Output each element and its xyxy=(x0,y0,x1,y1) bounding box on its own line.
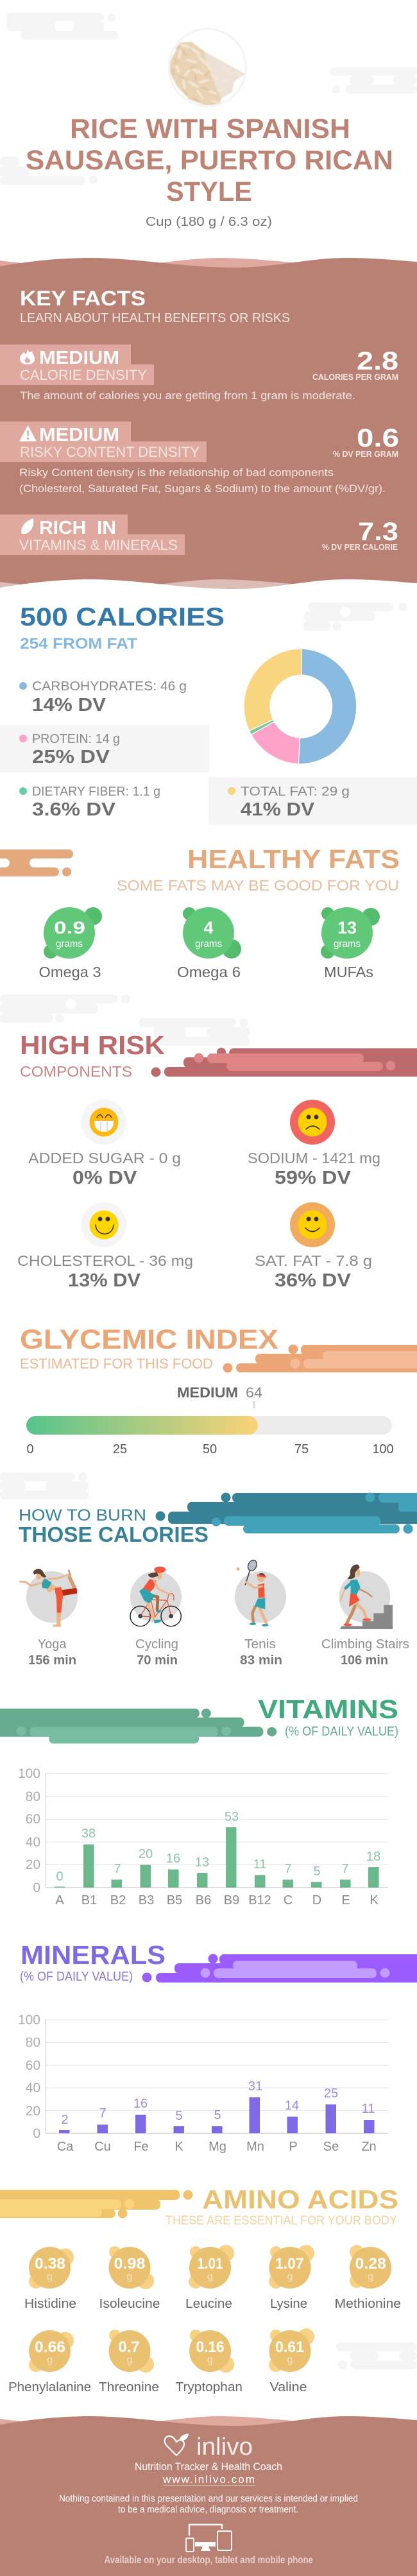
rating: RICH IN xyxy=(39,518,116,538)
value labels: 31 xyxy=(248,2079,262,2094)
gauge scale: 100 xyxy=(372,1442,394,1456)
x axis: B6 xyxy=(196,1893,211,1907)
gauge bar xyxy=(26,1416,392,1435)
value labels: 38 xyxy=(81,1827,96,1841)
risk item: sodium: SODIUM - 1421 mg xyxy=(248,1150,380,1166)
legend: total fat: TOTAL FAT: 29 g xyxy=(241,785,350,799)
label: Yoga xyxy=(38,1637,67,1651)
value labels xyxy=(61,2079,375,2127)
heading band xyxy=(0,849,74,876)
unit: % DV PER GRAM xyxy=(333,449,398,459)
website link: www.inlivo.com xyxy=(162,2473,255,2486)
legend: protein: PROTEIN: 14 g xyxy=(32,732,120,746)
y axis: 100 xyxy=(18,2013,40,2027)
heading band xyxy=(223,1345,417,1373)
legend: carbohydrates xyxy=(19,679,187,715)
amino badge: phenylalanine: 0.66 xyxy=(35,2339,65,2356)
subheading: THESE ARE ESSENTIAL FOR YOUR BODY xyxy=(166,2214,397,2228)
panel: healthy fats xyxy=(0,844,400,980)
x axis: B3 xyxy=(139,1893,154,1907)
legend: carbohydrates: CARBOHYDRATES: 46 g xyxy=(32,679,187,694)
duration: 106 min xyxy=(341,1653,388,1668)
bar chart: minerals xyxy=(18,2013,388,2154)
subheading: LEARN ABOUT HEALTH BENEFITS OR RISKS xyxy=(20,311,290,325)
heading band xyxy=(142,1954,417,1983)
value labels: 25 xyxy=(324,2086,338,2101)
x axis xyxy=(55,1893,379,1907)
availability note: Available on your desktop, tablet and mobile phone xyxy=(104,2555,313,2566)
risk item: saturated fat: SAT. FAT - 7.8 g xyxy=(255,1252,372,1269)
value: 0.6 xyxy=(357,424,399,452)
value labels: 5 xyxy=(313,1864,321,1879)
heading: key facts: KEY FACTS xyxy=(20,287,146,310)
legend: total fat: 41% DV xyxy=(241,799,315,820)
amino badge: methionine: Methionine xyxy=(335,2297,401,2311)
badge: mufas: 13 xyxy=(337,918,357,937)
heading: those calories: THOSE CALORIES xyxy=(19,1523,208,1546)
value labels: 5 xyxy=(214,2108,221,2122)
legend: dietary fiber: DIETARY FIBER: 1.1 g xyxy=(32,785,160,799)
rating: MEDIUM xyxy=(39,425,119,445)
value labels: 20 xyxy=(139,1847,153,1861)
x axis: E xyxy=(341,1893,350,1907)
value labels: 11 xyxy=(362,2102,375,2116)
heading: glycemic index: GLYCEMIC INDEX xyxy=(20,1324,278,1355)
duration: 70 min xyxy=(137,1653,178,1668)
risk item: saturated fat xyxy=(255,1202,372,1291)
top wave xyxy=(0,258,417,276)
subheading: (% OF DAILY VALUE) xyxy=(285,1725,398,1739)
label: Tenis xyxy=(244,1637,276,1651)
x axis: Fe xyxy=(133,2140,149,2154)
x axis: B1 xyxy=(81,1893,97,1907)
subheading: ESTIMATED FOR THIS FOOD xyxy=(20,1356,213,1372)
badge: omega 6: Omega 6 xyxy=(177,964,241,980)
amino badge: valine: 0.61 xyxy=(275,2339,304,2356)
amino badge: leucine: 1.01 xyxy=(198,2255,223,2273)
serving size: Cup (180 g / 6.3 oz) xyxy=(146,215,272,229)
subheading: (% OF DAILY VALUE) xyxy=(20,1970,133,1984)
unit: CALORIES PER GRAM xyxy=(312,372,398,382)
gauge scale xyxy=(26,1442,394,1456)
exercise: yoga xyxy=(21,1569,78,1668)
panel: vitamins xyxy=(0,1694,398,1907)
amino badge: valine: Valine xyxy=(269,2380,307,2394)
badge: omega 3: 0.9 xyxy=(54,918,85,937)
value labels: 16 xyxy=(166,1852,180,1866)
exercise: cycling xyxy=(130,1567,182,1668)
x axis: Mg xyxy=(208,2140,226,2154)
y axis: 60 xyxy=(26,1812,40,1827)
amino badge: lysine xyxy=(269,2245,314,2311)
heading band xyxy=(151,1048,417,1077)
tagline: Nutrition Tracker & Health Coach xyxy=(135,2461,282,2473)
panel: glycemic index xyxy=(20,1324,417,1456)
x axis: Mn xyxy=(246,2140,264,2154)
risk item: cholesterol xyxy=(17,1202,193,1291)
x axis xyxy=(57,2140,377,2154)
food photo: rice in circle xyxy=(169,29,246,106)
y axis: 0 xyxy=(33,1881,40,1895)
panel: how to burn those calories xyxy=(19,1492,417,1668)
panel: footer xyxy=(0,2416,417,2576)
legend: total fat xyxy=(208,778,417,825)
y axis: 40 xyxy=(26,2081,40,2095)
icon: climbing stairs figure xyxy=(339,1564,393,1629)
amino badge: isoleucine xyxy=(99,2246,160,2311)
icon: devices xyxy=(186,2525,232,2552)
x axis: B2 xyxy=(110,1893,126,1907)
donut chart xyxy=(244,649,357,764)
title: STYLE xyxy=(166,176,252,207)
value labels: 53 xyxy=(225,1810,239,1824)
risk item: saturated fat: 36% DV xyxy=(275,1270,352,1291)
y axis xyxy=(18,1766,40,1895)
panel: amino acids xyxy=(0,2185,401,2394)
amino badge: lysine: g xyxy=(287,2271,293,2282)
fact: rich in vitamins and minerals xyxy=(0,515,398,555)
y axis: 20 xyxy=(26,1857,40,1872)
badge: omega 3: grams xyxy=(56,939,83,950)
icon: tennis figure xyxy=(235,1558,286,1626)
x axis: B9 xyxy=(224,1893,239,1907)
badge: omega 3 xyxy=(38,907,102,980)
amino badge: lysine: Lysine xyxy=(270,2297,307,2311)
x axis: Zn xyxy=(361,2140,377,2154)
y axis: 80 xyxy=(26,1789,40,1804)
gauge scale: 75 xyxy=(294,1442,309,1456)
x axis: Se xyxy=(323,2140,339,2154)
amino badge: tryptophan: Tryptophan xyxy=(176,2380,243,2394)
disclaimer xyxy=(59,2493,358,2515)
exercise: climbing stairs xyxy=(321,1564,409,1668)
x axis: K xyxy=(174,2140,183,2154)
legend: carbohydrates: 14% DV xyxy=(32,695,106,715)
label: CALORIE DENSITY xyxy=(20,367,147,383)
amino badge: tryptophan xyxy=(176,2330,243,2394)
bar chart: vitamins xyxy=(18,1766,388,1907)
amino badge: histidine: g xyxy=(47,2271,53,2282)
value labels: 16 xyxy=(133,2097,148,2111)
value labels xyxy=(56,1810,380,1884)
badge: mufas xyxy=(321,907,380,980)
x axis: Ca xyxy=(57,2140,74,2154)
x axis: Cu xyxy=(94,2140,111,2154)
description: (Cholesterol, Saturated Fat, Sugars & Sodium) to the amount (%DV/gr). xyxy=(19,483,386,495)
y axis: 20 xyxy=(26,2104,40,2119)
x axis: D xyxy=(312,1893,321,1907)
value labels: 18 xyxy=(366,1850,380,1864)
amino badge: methionine xyxy=(335,2245,401,2311)
amino badge: histidine: Histidine xyxy=(24,2297,76,2311)
amino badge: histidine: 0.38 xyxy=(35,2255,65,2273)
value: 2.8 xyxy=(357,347,398,375)
badge: omega 6: 4 xyxy=(203,918,214,937)
icon: cycling figure xyxy=(130,1567,182,1626)
gauge scale: 50 xyxy=(203,1442,217,1456)
exercise: tennis xyxy=(235,1558,286,1668)
amino badge: isoleucine: 0.98 xyxy=(114,2255,145,2273)
amino badge: lysine: 1.07 xyxy=(275,2255,304,2273)
bars xyxy=(54,1827,379,1888)
legend: protein: 25% DV xyxy=(32,747,110,767)
duration: 156 min xyxy=(28,1653,76,1668)
duration: 83 min xyxy=(240,1653,282,1668)
heading: minerals: MINERALS xyxy=(21,1940,166,1970)
x axis: C xyxy=(284,1893,293,1907)
label: Cycling xyxy=(135,1637,178,1651)
panel: minerals xyxy=(18,1940,417,2154)
amino badge: valine: g xyxy=(287,2355,293,2366)
heading: 500 calories: 500 CALORIES xyxy=(20,603,225,631)
label: VITAMINS & MINERALS xyxy=(19,537,178,553)
value labels: 0 xyxy=(56,1870,64,1884)
risk item: added sugar: 0% DV xyxy=(72,1168,137,1188)
risk item: cholesterol: CHOLESTEROL - 36 mg xyxy=(17,1252,193,1269)
logo: inlivo xyxy=(165,2434,253,2461)
value labels: 5 xyxy=(175,2109,183,2123)
fact: calorie density xyxy=(0,345,398,402)
amino badge: leucine xyxy=(185,2245,234,2311)
title xyxy=(26,114,393,207)
x axis: A xyxy=(55,1893,64,1907)
amino badge: threonine xyxy=(99,2330,159,2394)
bottom wave xyxy=(0,579,417,597)
y axis: 60 xyxy=(26,2058,40,2073)
value labels: 7 xyxy=(284,1862,292,1876)
gauge label: MEDIUM xyxy=(177,1385,238,1401)
icon: flame xyxy=(20,348,35,364)
amino badge: threonine: Threonine xyxy=(99,2380,159,2394)
disclaimer: to be a medical advice, diagnosis or treatment. xyxy=(118,2504,298,2515)
label: Climbing Stairs xyxy=(321,1637,409,1651)
icon: warning triangle xyxy=(19,425,37,441)
badge: mufas: MUFAs xyxy=(324,964,373,980)
value labels: 7 xyxy=(114,1862,121,1876)
risk item: sodium xyxy=(248,1100,380,1188)
heading: how to burn: HOW TO BURN xyxy=(19,1506,146,1524)
heading band xyxy=(0,1709,277,1743)
title: SAUSAGE, PUERTO RICAN xyxy=(26,145,393,176)
value: 7.3 xyxy=(358,518,398,546)
value labels: 7 xyxy=(341,1862,349,1876)
amino badge: methionine: g xyxy=(368,2271,373,2282)
legend: protein xyxy=(0,725,209,772)
risk item: added sugar xyxy=(28,1100,181,1188)
fact: risky content density xyxy=(0,422,399,495)
gauge scale: 25 xyxy=(113,1442,127,1456)
y axis: 80 xyxy=(26,2035,40,2050)
x axis: P xyxy=(289,2140,298,2154)
footer wave xyxy=(0,2416,417,2434)
header: food photo and title xyxy=(26,29,393,229)
value labels: 14 xyxy=(285,2099,299,2113)
rating: MEDIUM xyxy=(39,348,119,368)
heading: high risk: HIGH RISK xyxy=(20,1030,165,1060)
logo: inlivo: inlivo xyxy=(196,2434,253,2461)
gauge label: 64 xyxy=(246,1385,262,1401)
icon: yoga figure xyxy=(21,1569,78,1627)
amino badge: phenylalanine xyxy=(8,2330,91,2394)
gauge scale: 0 xyxy=(26,1442,34,1456)
y axis xyxy=(18,2013,40,2141)
risk item: added sugar: ADDED SUGAR - 0 g xyxy=(28,1150,181,1166)
title: RICE WITH SPANISH xyxy=(70,114,350,144)
badge: mufas: grams xyxy=(334,939,361,950)
amino badge: isoleucine: g xyxy=(127,2271,132,2282)
x axis: B5 xyxy=(167,1893,182,1907)
gauge label xyxy=(177,1385,262,1408)
heading: healthy fats: HEALTHY FATS xyxy=(187,844,400,874)
amino badge: phenylalanine: Phenylalanine xyxy=(8,2380,91,2394)
amino badge: isoleucine: Isoleucine xyxy=(99,2297,160,2311)
amino badge: threonine: 0.7 xyxy=(118,2339,140,2356)
subheading: from fat: 254 FROM FAT xyxy=(20,635,137,653)
badge: omega 3: Omega 3 xyxy=(38,964,101,980)
x axis: B12 xyxy=(248,1893,271,1907)
label: RISKY CONTENT DENSITY xyxy=(20,444,200,460)
legend: dietary fiber xyxy=(19,785,160,820)
amino badge: tryptophan: g xyxy=(207,2355,213,2366)
subheading: SOME FATS MAY BE GOOD FOR YOU xyxy=(117,877,399,894)
legend: dietary fiber: 3.6% DV xyxy=(32,799,116,820)
unit: % DV PER CALORIE xyxy=(322,542,398,552)
amino badge: tryptophan: 0.16 xyxy=(196,2339,225,2356)
amino badge: leucine: Leucine xyxy=(185,2297,232,2311)
subheading: COMPONENTS xyxy=(20,1063,132,1080)
value labels: 7 xyxy=(99,2106,106,2120)
y axis: 100 xyxy=(18,1766,40,1781)
amino badge: methionine: 0.28 xyxy=(355,2255,386,2273)
amino badge: threonine: g xyxy=(127,2355,132,2366)
heading: amino acids: AMINO ACIDS xyxy=(202,2185,398,2214)
value labels: 13 xyxy=(195,1855,209,1870)
description: Risky Content density is the relationship of bad components xyxy=(19,467,334,479)
description: The amount of calories you are getting from 1 gram is moderate. xyxy=(20,390,355,402)
risk item: sodium: 59% DV xyxy=(275,1168,352,1188)
badge: omega 6: grams xyxy=(195,939,222,950)
amino badge: phenylalanine: g xyxy=(47,2355,53,2366)
heading band xyxy=(0,2190,192,2219)
bars xyxy=(59,2097,375,2133)
amino badge: leucine: g xyxy=(207,2271,213,2282)
risk item: cholesterol: 13% DV xyxy=(68,1270,141,1291)
description xyxy=(19,467,386,495)
badge: omega 6 xyxy=(177,907,241,980)
heading band xyxy=(155,1492,417,1533)
amino badge: histidine xyxy=(24,2247,76,2311)
panel: calories xyxy=(0,603,417,825)
disclaimer: Nothing contained in this presentation and our services is intended or implied xyxy=(59,2493,358,2504)
x axis: K xyxy=(370,1893,379,1907)
panel: key facts xyxy=(0,258,417,597)
y axis: 0 xyxy=(33,2126,40,2141)
y axis: 40 xyxy=(26,1835,40,1850)
panel: high risk components xyxy=(17,1030,417,1291)
amino badge: valine xyxy=(269,2328,314,2394)
value labels: 11 xyxy=(253,1857,266,1872)
value labels: 2 xyxy=(61,2113,69,2127)
icon: leaf xyxy=(21,518,33,534)
heading: vitamins: VITAMINS xyxy=(258,1694,398,1724)
